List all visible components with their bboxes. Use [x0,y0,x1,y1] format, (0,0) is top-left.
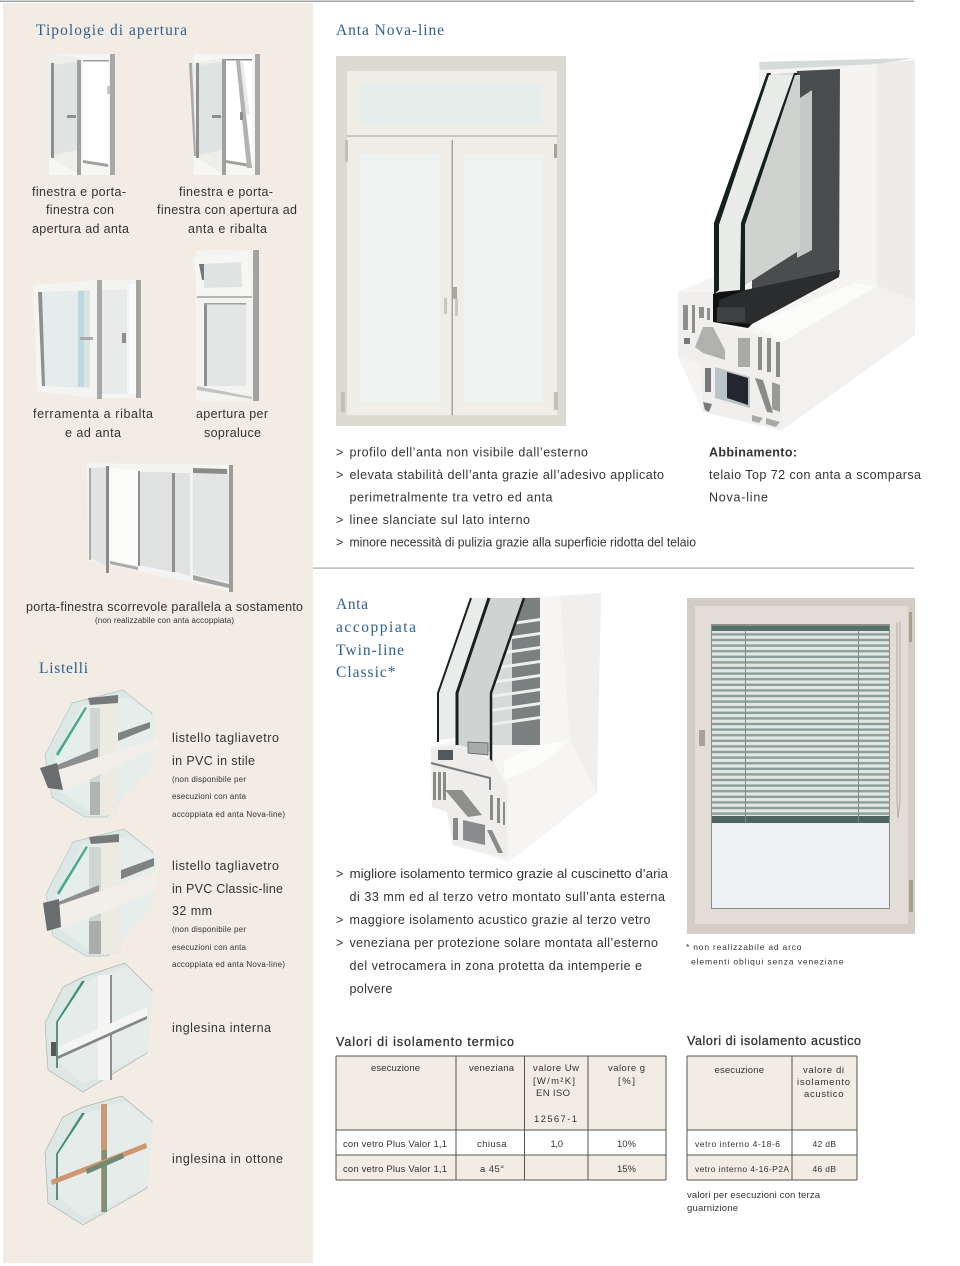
list: Nova-line features: > [336,446,343,460]
table: thermal insulation: a 45° [480,1164,504,1175]
list: Nova-line features: profilo dell’anta non visibile dall’esterno [350,446,588,460]
caption: sliding patio door: (non realizzabile con anta accoppiata) [95,616,234,625]
table: acoustic insulation: vetro interno 4-18-6 [695,1139,780,1149]
list: Nova-line features: elevata stabilità dell’anta grazie all’adesivo applicato [350,468,664,482]
top rule [0,0,914,2]
heading: Tipologie di apertura: Tipologie di apertura [36,22,187,39]
table: thermal insulation: chiusa [477,1139,507,1150]
heading: Anta accoppiata Twin-line Classic [336,596,416,681]
heading: Anta accoppiata Twin-line Classic: Anta [336,596,368,613]
table: thermal insulation [336,1056,666,1180]
caption: tilt and turn: anta e ribalta [188,222,267,236]
table: acoustic insulation: 46 dB [812,1164,836,1174]
icon: internal muntin [45,963,153,1092]
table: acoustic insulation: acustico [804,1089,844,1100]
table: thermal insulation: veneziana [469,1063,515,1074]
caption: tilt hardware [33,407,153,440]
text: Abbinamento: telaio Top 72 con anta a scomparsa [709,468,921,482]
caption: tilt hardware: ferramenta a ribalta [33,407,153,421]
text: internal muntin: inglesina interna [172,1021,271,1035]
note: acoustic table footnote [687,1190,821,1214]
icon: transom window [193,250,259,401]
table: acoustic insulation: valore di [803,1065,844,1076]
note: blind restrictions: elementi obliqui senza veneziane [691,956,844,966]
text: glazing bar Classic-line: esecuzioni con anta [172,943,247,952]
list: Nova-line features: perimetralmente tra vetro ed anta [350,490,553,504]
list: Nova-line features [336,446,696,550]
list: Twin-line features: > [336,913,343,927]
text: Abbinamento [709,446,921,504]
list: Twin-line features: veneziana per protezione solare montata all’esterno [350,936,658,950]
text: glazing bar in PVC style: (non disponibile per [172,775,246,784]
text: glazing bar Classic-line: listello tagliavetro [172,859,279,873]
heading: Anta accoppiata Twin-line Classic: Twin-line [336,642,404,659]
photo: window with venetian blind [687,598,915,934]
table: acoustic insulation: esecuzione [714,1065,764,1076]
text: glazing bar Classic-line: 32 mm [172,904,212,918]
heading: acoustic insulation values: Valori di isolamento acustico [687,1034,861,1048]
list: Twin-line features: maggiore isolamento acustico grazie al terzo vetro [350,913,651,927]
list: Nova-line features: linee slanciate sul lato interno [350,513,530,527]
heading: thermal insulation values: Valori di isolamento termico [336,1035,514,1049]
caption: transom [196,407,268,440]
text: brass muntin: inglesina in ottone [172,1152,283,1166]
caption: side-hung [32,185,129,236]
table: thermal insulation: [%] [618,1076,635,1087]
list: Twin-line features: > [336,936,343,950]
caption: tilt hardware: e ad anta [65,426,121,440]
text: glazing bar Classic-line: accoppiata ed anta Nova-line) [172,960,285,969]
list: Nova-line features: > [336,513,343,527]
caption: side-hung: finestra con [46,203,114,217]
text: Abbinamento: Abbinamento: [709,446,797,460]
icon: tilt hardware window [33,280,141,399]
table: thermal insulation: valore g [608,1063,645,1074]
list: Twin-line features: di 33 mm ed al terzo vetro montato sull’anta esterna [350,890,665,904]
caption: sliding patio door: porta-finestra scorrevole parallela a sostamento [26,600,303,614]
icon: window with side-hung opening [47,53,115,176]
note: blind restrictions: * non realizzabile ad arco [686,942,802,952]
list: Nova-line features: > [336,536,343,550]
text: glazing bar Classic-line: (non disponibile per [172,925,246,934]
icon: glazing bar Classic-line [43,829,157,956]
text: glazing bar Classic-line: in PVC Classic-line [172,882,283,896]
text: glazing bar in PVC style [172,731,285,819]
table: thermal insulation: EN ISO [536,1088,570,1099]
illustration: Twin-line section [431,593,601,863]
table: acoustic insulation: 42 dB [812,1139,836,1149]
panel: left sidebar background [3,3,313,1263]
table: thermal insulation: 10% [617,1139,637,1150]
list: Twin-line features: polvere [350,982,393,996]
icon: sliding patio door [87,463,233,592]
table: thermal insulation: 1,0 [550,1139,563,1150]
heading: Anta Nova-line: Anta Nova-line [336,22,444,39]
caption: tilt and turn: finestra con apertura ad [157,203,297,217]
table: thermal insulation: valore Uw [533,1063,579,1074]
caption: transom: sopraluce [204,426,261,440]
table: thermal insulation: esecuzione [371,1063,420,1074]
caption: sliding patio door [26,600,303,625]
text: glazing bar Classic-line [172,859,285,969]
note: acoustic table footnote: guarnizione [687,1203,738,1214]
heading: Listelli: Listelli [39,660,89,677]
list: Twin-line features: del vetrocamera in zona protetta da intemperie e [350,959,642,973]
table: acoustic insulation [687,1056,857,1180]
list: Nova-line features: minore necessità di pulizia grazie alla superficie ridotta del telaio [350,536,696,550]
table: thermal insulation: [W/m²K] [533,1076,575,1087]
text: glazing bar in PVC style: in PVC in stile [172,754,255,768]
caption: transom: apertura per [196,407,268,421]
heading: Anta accoppiata Twin-line Classic: Classic* [336,664,396,681]
list: Nova-line features: > [336,468,343,482]
table: thermal insulation: con vetro Plus Valor 1,1 [343,1139,447,1150]
caption: side-hung: apertura ad anta [32,222,129,236]
caption: side-hung: finestra e porta- [32,185,126,199]
list: Twin-line features: > [336,867,343,881]
heading: Anta accoppiata Twin-line Classic: accoppiata [336,619,416,636]
table: thermal insulation: 12567-1 [534,1114,577,1125]
table: thermal insulation: con vetro Plus Valor 1,1 [343,1164,447,1175]
table: acoustic insulation: isolamento [797,1077,850,1088]
note: blind restrictions [686,942,844,966]
illustration: Nova-line section [678,58,915,431]
table: thermal insulation: 15% [617,1164,637,1175]
icon: glazing bar in PVC style [40,690,159,817]
list: Twin-line features: migliore isolamento termico grazie al cuscinetto d’aria [350,867,668,881]
photo: Nova-line window [336,56,566,426]
icon: brass muntin [45,1096,153,1225]
list: Twin-line features [336,867,668,996]
note: acoustic table footnote: valori per esecuzioni con terza [687,1190,821,1201]
caption: tilt and turn: finestra e porta- [179,185,273,199]
section rule [313,568,914,569]
icon: window with tilt and turn opening [189,54,260,176]
text: glazing bar in PVC style: accoppiata ed anta Nova-line) [172,810,285,819]
caption: tilt and turn [157,185,297,236]
text: glazing bar in PVC style: esecuzioni con anta [172,792,247,801]
text: glazing bar in PVC style: listello tagliavetro [172,731,279,745]
text: Abbinamento: Nova-line [709,490,768,504]
table: acoustic insulation: vetro interno 4-16-P2A [695,1164,789,1174]
